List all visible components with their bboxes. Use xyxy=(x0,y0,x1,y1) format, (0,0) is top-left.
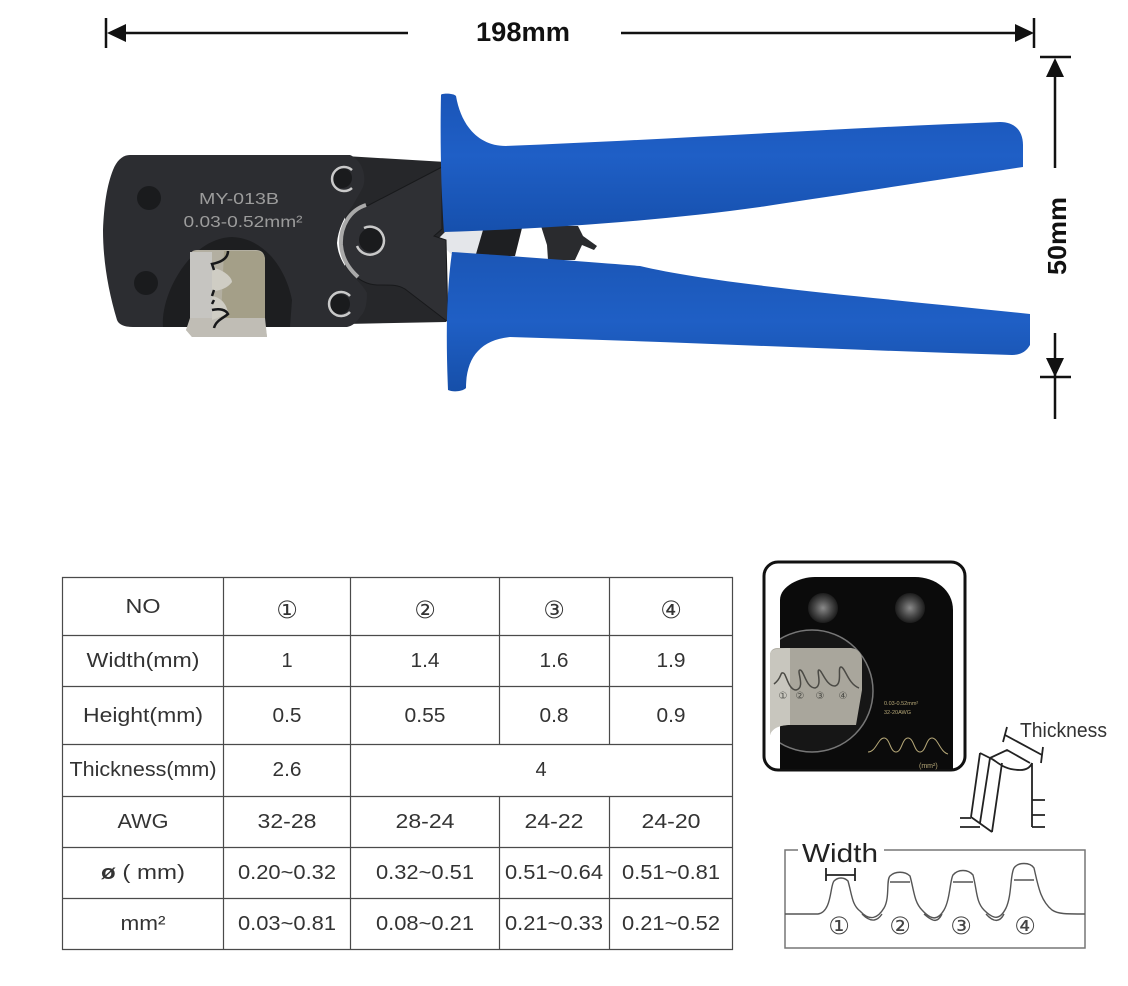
row: diameter: 0.20~0.32 xyxy=(238,862,336,884)
steel jaw plate xyxy=(103,155,367,327)
frame xyxy=(785,850,1085,948)
row: Height: 0.5 xyxy=(272,705,302,727)
thickness diagram xyxy=(960,720,1107,832)
die insert xyxy=(770,648,862,735)
width bracket xyxy=(826,868,855,881)
row: cross-section: mm² xyxy=(120,913,166,935)
mounting bolts xyxy=(808,593,925,623)
crimping tool photo xyxy=(103,94,1030,391)
dimension: handle width 50mm xyxy=(1040,57,1072,419)
row: Width xyxy=(86,650,686,672)
row: diameter xyxy=(101,862,720,884)
die number markings: ② xyxy=(796,691,804,702)
printed spec text: 32-20AWG xyxy=(884,710,911,716)
die number markings xyxy=(779,691,847,702)
upper blue handle xyxy=(441,94,1023,232)
tooth numbers: ④ xyxy=(1014,912,1036,940)
row: Thickness: Thickness(mm) xyxy=(70,759,216,781)
tooth numbers: ③ xyxy=(950,912,972,940)
metal crimping die xyxy=(186,250,267,337)
lens circle xyxy=(780,629,874,753)
die number markings: ① xyxy=(779,691,787,702)
row: AWG: 32-28 xyxy=(258,811,316,833)
row: cross-section: 0.21~0.33 xyxy=(505,913,603,935)
table grid xyxy=(62,577,733,950)
label: Width: Width xyxy=(802,838,878,868)
row: NO: ③ xyxy=(543,596,565,624)
row: cross-section: 0.21~0.52 xyxy=(622,913,720,935)
label: 50mm: 50mm xyxy=(1042,197,1072,275)
printed spec text: 0.03-0.52mm² xyxy=(884,701,918,707)
row: Width: 1 xyxy=(281,650,293,672)
pivot washer xyxy=(341,205,366,277)
row: Height: 0.9 xyxy=(656,705,686,727)
row: NO: ② xyxy=(414,596,436,624)
row: diameter: 0.32~0.51 xyxy=(376,862,474,884)
row: diameter: ø ( mm) xyxy=(101,862,185,884)
tooth profile xyxy=(785,864,1085,920)
row: AWG xyxy=(118,811,700,833)
engraved model text: MY-013B xyxy=(199,191,279,208)
tooth numbers: ② xyxy=(889,912,911,940)
row: Width: 1.4 xyxy=(410,650,440,672)
specification table xyxy=(62,577,733,950)
row: Height xyxy=(83,705,686,727)
row: Width: 1.6 xyxy=(540,650,568,672)
row: cross-section: 0.03~0.81 xyxy=(238,913,336,935)
row: NO: ④ xyxy=(660,596,682,624)
row: cross-section: 0.08~0.21 xyxy=(376,913,474,935)
row: AWG: 24-20 xyxy=(642,811,700,833)
tooth numbers: ① xyxy=(828,912,850,940)
rivets xyxy=(134,167,384,316)
row: diameter: 0.51~0.64 xyxy=(505,862,603,884)
row: diameter: 0.51~0.81 xyxy=(622,862,720,884)
row: Thickness: 4 xyxy=(535,759,547,781)
pivot arm plate xyxy=(341,167,448,322)
row: Width: Width(mm) xyxy=(86,650,200,672)
tooth numbers xyxy=(828,912,1036,940)
row: Thickness: 2.6 xyxy=(272,759,302,781)
row: Width: 1.9 xyxy=(656,650,686,672)
row: NO xyxy=(126,596,682,624)
label: 198mm: 198mm xyxy=(476,17,570,47)
row: cross-section xyxy=(120,913,720,935)
printed spec text: (mm²) xyxy=(919,763,938,770)
lower blue handle xyxy=(447,252,1030,391)
row: NO: NO xyxy=(126,596,160,618)
width diagram xyxy=(785,838,1085,948)
label: Thickness: Thickness xyxy=(1020,720,1107,742)
row: Height: Height(mm) xyxy=(83,705,203,727)
rear plate and ratchet xyxy=(345,156,597,324)
engraved model text: 0.03-0.52mm² xyxy=(184,214,303,231)
die number markings: ③ xyxy=(816,691,824,702)
row: AWG: 28-24 xyxy=(396,811,454,833)
printed tooth outline xyxy=(868,738,948,754)
dimension: overall length 198mm xyxy=(106,17,1034,48)
row: NO: ① xyxy=(276,596,298,624)
row: Height: 0.8 xyxy=(540,705,568,727)
row: Thickness xyxy=(70,759,547,781)
row: AWG: AWG xyxy=(118,811,168,833)
printed spec text xyxy=(884,701,938,770)
engraved model text xyxy=(184,191,303,231)
die close-up photo xyxy=(751,562,965,770)
row: AWG: 24-22 xyxy=(524,811,584,833)
die number markings: ④ xyxy=(839,691,847,702)
row: Height: 0.55 xyxy=(404,705,446,727)
